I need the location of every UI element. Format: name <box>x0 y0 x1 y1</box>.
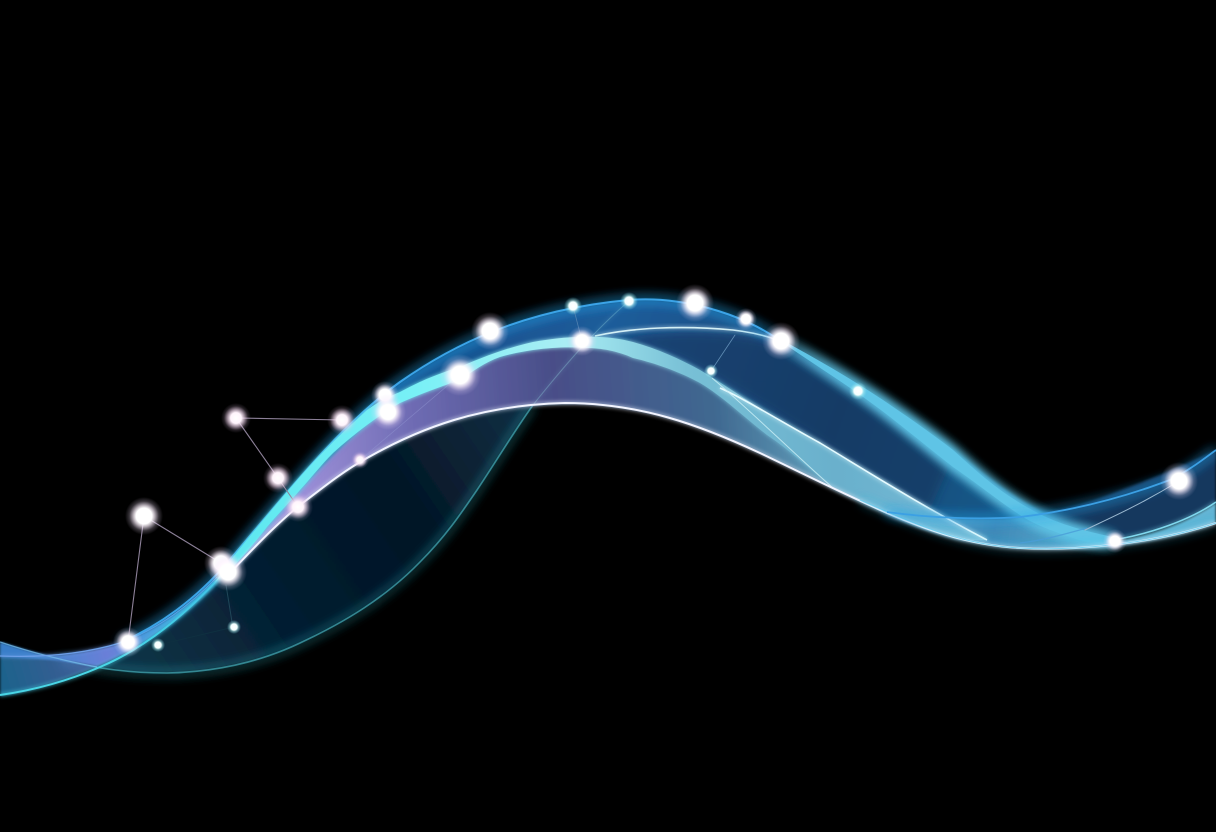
node: top edge small <box>564 297 582 315</box>
node: right large <box>1160 462 1198 500</box>
node: thick band large <box>439 354 481 396</box>
node: on white edge <box>283 492 313 522</box>
ribbon: shadow crossing edge highlight <box>533 301 629 405</box>
node: right of apex <box>735 308 757 330</box>
node: on purple band <box>351 451 369 469</box>
ribbon: dark shadow sweep <box>60 403 600 673</box>
node: apex small <box>620 292 638 310</box>
ribbon: top blue edge <box>120 299 782 643</box>
ribbon: thin blue low line <box>1020 528 1087 543</box>
ribbon: darker panel under second arc <box>610 332 950 510</box>
ribbon: right blue edge <box>887 450 1216 518</box>
node: cluster upper <box>204 546 238 580</box>
node: small under wave <box>227 620 241 634</box>
ribbon: upper blue body <box>228 299 1113 563</box>
node: tail <box>113 627 143 657</box>
ribbon: purple centre band <box>228 345 835 575</box>
node: descending edge <box>849 382 867 400</box>
network connector lines <box>128 306 1179 645</box>
ribbon: upper return band <box>782 340 1113 544</box>
node: arc junction <box>762 322 800 360</box>
node: lower right <box>1103 529 1127 553</box>
ribbon: main thick cyan band <box>215 337 987 582</box>
node: apex large <box>676 284 714 322</box>
ribbon: crossing line on pale band <box>712 378 833 488</box>
node: pink upper left <box>221 403 251 433</box>
ribbon: right blue return band <box>880 450 1216 545</box>
node: top of thick band <box>371 381 399 409</box>
ribbon: second arc line <box>595 328 782 342</box>
network nodes <box>113 284 1198 657</box>
ribbon: left tail bands <box>0 572 228 696</box>
node: on pale band <box>704 364 718 378</box>
node: on thick band <box>370 394 406 430</box>
node: small tail <box>151 638 165 652</box>
node: left large <box>125 497 163 535</box>
node: pink middle <box>263 463 293 493</box>
ribbon: lower white edge <box>228 403 1216 575</box>
node: crossing <box>567 326 597 356</box>
ribbon: pale lower right band <box>887 503 1216 549</box>
node: cluster lower <box>209 553 247 591</box>
node: pink upper right <box>327 405 357 435</box>
node: top edge large <box>471 312 509 350</box>
ribbon: right pale band edge <box>1113 502 1216 540</box>
ribbon: white line through lower right <box>720 388 987 540</box>
